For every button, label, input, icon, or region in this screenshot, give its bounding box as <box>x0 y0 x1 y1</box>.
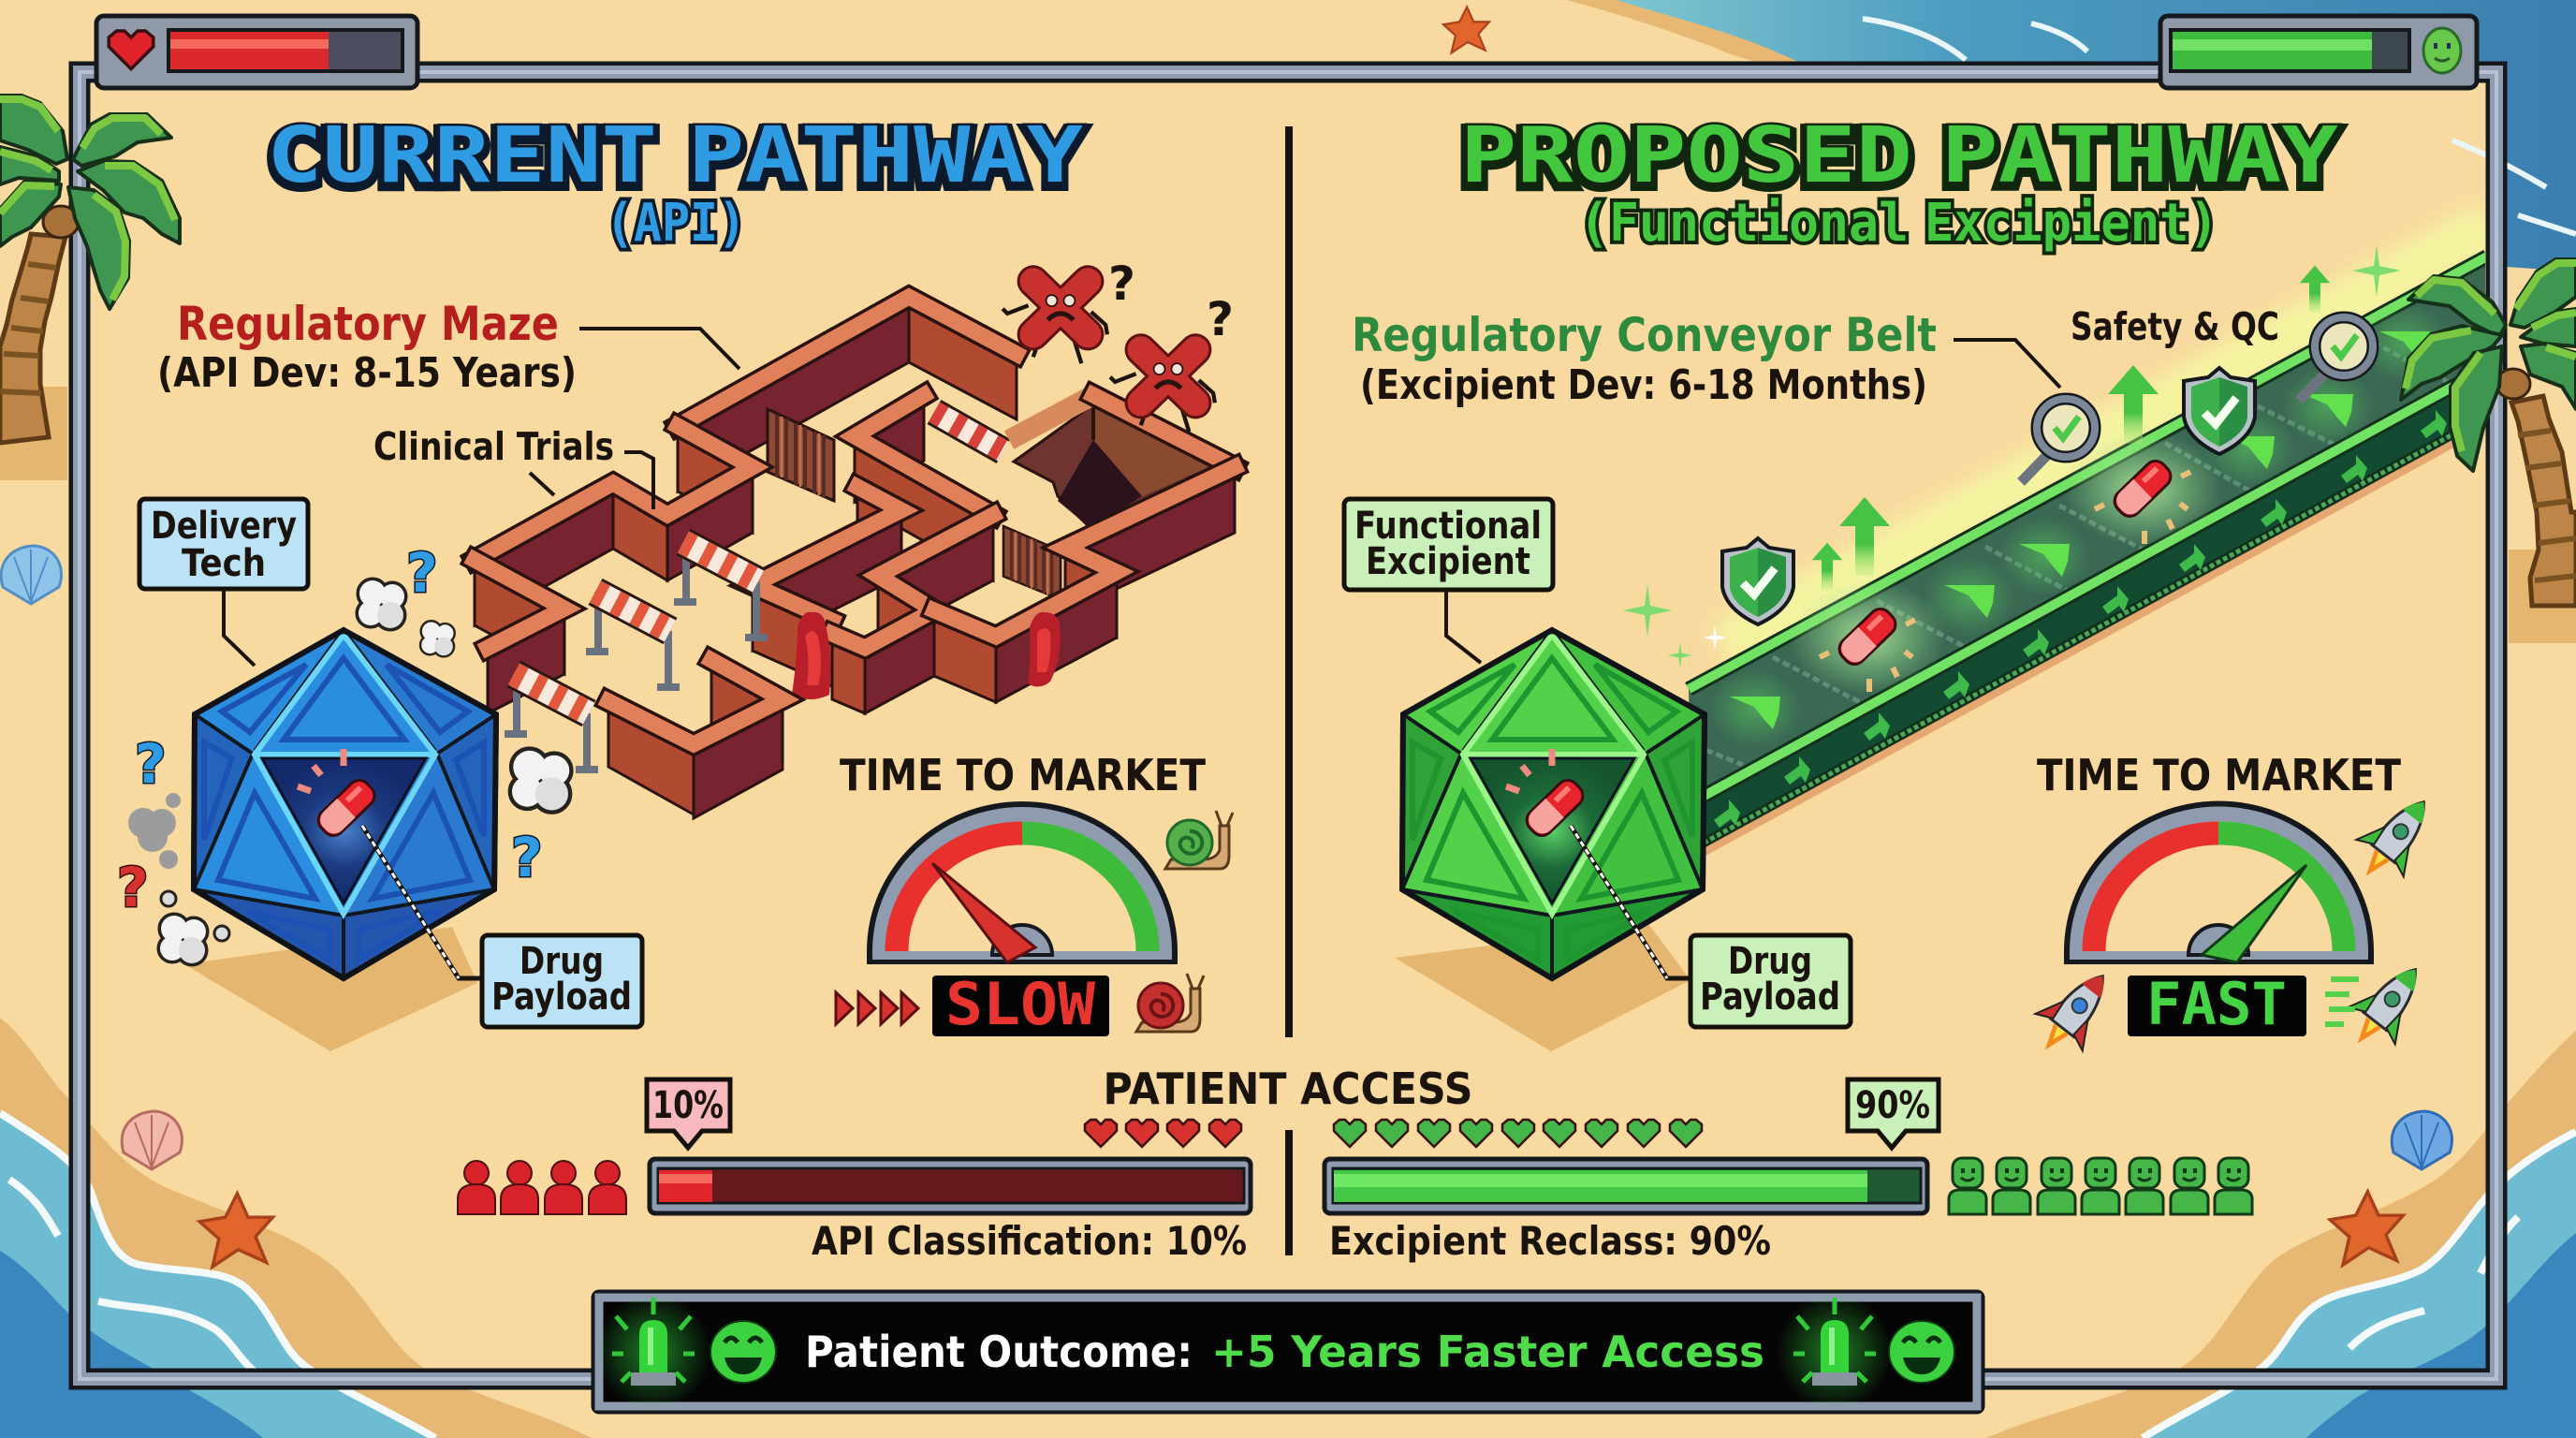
people: green <box>1949 1158 2252 1214</box>
shallow water: bottom right <box>2143 1132 2576 1438</box>
label: regulatory conveyor belt <box>1352 308 1937 409</box>
palm tree: right <box>2401 259 2576 643</box>
back wall <box>678 297 1017 492</box>
fronds <box>2401 259 2576 471</box>
heading: proposed pathway: PATHWAY <box>1941 115 2339 204</box>
sea decoration: blue shell right <box>2392 1111 2452 1169</box>
deep water: bottom right <box>2306 1233 2576 1438</box>
arrow up <box>2108 365 2159 444</box>
label: functional excipient: Excipient <box>1366 540 1530 583</box>
label: drug payload green: Drug <box>1728 940 1812 983</box>
gauge green arc <box>1022 833 1148 951</box>
d20 shadow: green <box>1395 925 1690 1051</box>
bar fill <box>2173 32 2372 69</box>
question mark blue: ? <box>511 826 543 889</box>
inner wall <box>855 395 993 580</box>
gauge frame <box>2064 801 2374 964</box>
belt side <box>1705 397 2450 837</box>
icon: red snail <box>1136 974 1204 1032</box>
shield <box>2184 368 2255 454</box>
gauge hub <box>992 925 1052 955</box>
gate <box>768 409 834 501</box>
icon: siren right <box>1777 1294 1893 1410</box>
question mark red: ? <box>117 856 149 919</box>
lower divider <box>1285 1130 1293 1255</box>
center divider <box>1285 126 1293 1037</box>
leader: conveyor belt <box>1954 340 2060 388</box>
gauge red arc <box>2094 833 2218 951</box>
slime drips <box>792 612 1061 699</box>
sea decoration: starfish bottom right <box>2330 1192 2403 1265</box>
barrier <box>505 674 598 770</box>
smoke <box>359 580 404 628</box>
bubble: 10 percent: 10% <box>652 1084 724 1127</box>
hearts: green <box>1334 1120 1702 1147</box>
belt top edge <box>1689 257 2487 689</box>
gauge frame <box>867 801 1178 964</box>
gate <box>1003 526 1061 599</box>
wave foam: top right <box>1863 19 2576 234</box>
leader: delivery tech <box>224 590 255 666</box>
palm tree: left <box>0 95 180 480</box>
coconut <box>2496 369 2530 399</box>
magnifier <box>2021 399 2095 482</box>
label: safety and qc: Safety & QC <box>2071 304 2279 349</box>
belt side arrows <box>1714 410 2447 828</box>
sparkle <box>1668 642 1692 668</box>
label: excipient reclass: Excipient Reclass: 90% <box>1329 1218 1771 1264</box>
smoke <box>421 622 453 655</box>
label: regulatory conveyor belt: Regulatory Conveyor Belt <box>1352 308 1937 362</box>
heading: proposed pathway: PROPOSED <box>1460 111 1912 200</box>
leader: drug payload green <box>1571 826 1690 978</box>
readout: fast: FAST <box>2146 970 2287 1038</box>
label: regulatory maze: (API Dev: 8-15 Years) <box>157 349 577 397</box>
leader: functional excipient <box>1446 591 1481 663</box>
barrier <box>934 412 1003 451</box>
label: drug payload green: Payload <box>1700 976 1840 1019</box>
arrow up <box>1839 497 1890 576</box>
question mark blue: ? <box>406 541 438 605</box>
icon: smiley left <box>710 1321 776 1383</box>
question mark: ? <box>1108 257 1135 311</box>
lower left wall <box>475 560 564 713</box>
conveyor belt <box>1689 225 2490 858</box>
leader: drug payload blue <box>362 826 482 978</box>
lower block <box>608 660 783 818</box>
pill on belt <box>1820 605 1915 692</box>
heading: proposed pathway: PATHWAY <box>1941 111 2339 200</box>
pill on belt <box>2095 457 2190 544</box>
fronds <box>0 95 180 309</box>
bar fill <box>170 32 329 69</box>
arrow up small <box>1812 543 1842 590</box>
label: delivery tech <box>139 499 308 589</box>
label: regulatory maze: Regulatory Maze <box>177 297 559 351</box>
leader: regulatory maze <box>579 329 739 369</box>
label: drug payload blue <box>482 935 642 1027</box>
deep water: bottom left <box>0 1251 263 1438</box>
sand mound <box>2509 550 2576 643</box>
sparkle white <box>1703 624 1727 651</box>
subheading: API: (API) <box>606 193 746 254</box>
icon: rocket right <box>2334 951 2439 1062</box>
belt bottom edge <box>1705 431 2452 847</box>
trunk <box>2511 396 2576 606</box>
label: drug payload blue: Drug <box>520 940 604 983</box>
smoke <box>512 751 569 811</box>
leader: clinical trials <box>530 452 653 509</box>
d20 shadow: blue <box>184 927 477 1051</box>
bar track <box>2171 30 2409 71</box>
belt glow <box>1722 225 2490 646</box>
sparkle <box>1623 584 1672 637</box>
upper left wall <box>475 426 753 625</box>
arrows: slow <box>836 992 918 1024</box>
question mark blue: ? <box>135 732 167 796</box>
heading: current pathway: PATHWAY <box>688 115 1084 204</box>
outcome text: Patient Outcome: <box>805 1327 1193 1377</box>
gauge needle <box>932 863 1035 962</box>
label: api classification: API Classification: 10% <box>812 1218 1247 1264</box>
bubble: 90 percent <box>1848 1079 1939 1148</box>
belt panel lines <box>1705 337 2448 765</box>
belt middle edge <box>1690 368 2487 803</box>
pit front wall <box>934 467 1235 702</box>
d20: functional excipient <box>1402 630 1705 978</box>
icon: pill in blue d20 <box>298 749 379 840</box>
icon: smiley right <box>1889 1321 1954 1383</box>
d20: delivery tech <box>194 630 496 978</box>
coconut <box>43 206 79 238</box>
label: functional excipient: Functional <box>1354 505 1542 548</box>
label: drug payload blue: Payload <box>491 976 632 1019</box>
pit <box>1009 395 1235 529</box>
shield <box>1722 538 1793 624</box>
label: drug payload green <box>1690 935 1851 1027</box>
banner: patient outcome <box>593 1292 1983 1412</box>
sparkle <box>2352 244 2401 297</box>
question mark: ? <box>1207 292 1234 346</box>
magnifier <box>2299 317 2373 401</box>
outcome value: +5 Years Faster Access <box>1211 1327 1764 1377</box>
health bar: right <box>2160 16 2477 88</box>
label: delivery tech: Delivery <box>151 505 297 548</box>
icon: siren left <box>595 1294 711 1410</box>
sea decoration: starfish top <box>1443 7 1489 52</box>
label: functional excipient <box>1344 499 1553 590</box>
gauge hub <box>2188 925 2248 955</box>
belt chevrons <box>1708 304 2452 748</box>
heading: current pathway <box>267 111 1084 254</box>
smoke <box>160 891 229 963</box>
label: delivery tech: Tech <box>182 542 266 585</box>
heading: current pathway: PATHWAY <box>688 111 1084 200</box>
progress bar: api <box>650 1159 1251 1213</box>
smoke and questions <box>117 541 569 963</box>
middle wall one <box>753 487 901 686</box>
gauge: fast <box>2064 801 2374 964</box>
barrier <box>586 592 680 687</box>
sea decoration: starfish bottom left <box>199 1194 272 1267</box>
middle wall two <box>832 515 993 713</box>
icon: rocket top <box>2343 784 2448 894</box>
bar fill <box>659 1170 712 1202</box>
foam: bottom right <box>2143 1132 2576 1438</box>
label: clinical trials: Clinical Trials <box>373 424 614 469</box>
hearts: red <box>1085 1120 1241 1147</box>
belt top surface <box>1689 257 2487 803</box>
heading: proposed pathway <box>1460 111 2339 254</box>
label: regulatory maze <box>157 297 577 397</box>
bubble: 10 percent <box>647 1079 730 1148</box>
progress bar: excipient <box>1325 1159 1927 1213</box>
icon: pill in green d20 <box>1506 749 1588 840</box>
ocean: top right <box>1617 0 2576 271</box>
bar fill <box>1334 1170 1867 1202</box>
sea decoration: pink shell <box>122 1111 182 1169</box>
subheading: functional excipient: (Functional <box>1579 193 1909 254</box>
label: time to market right: TIME TO MARKET <box>2037 750 2402 800</box>
health bar: left <box>96 16 417 88</box>
sea decoration: blue shell left <box>1 546 61 604</box>
wet sand: bottom right <box>1986 1031 2576 1438</box>
readout: slow: SLOW <box>945 970 1096 1038</box>
heading: proposed pathway: PROPOSED <box>1460 115 1912 204</box>
sand mound <box>0 387 67 480</box>
gauge needle <box>2202 865 2306 962</box>
barrier <box>674 542 768 638</box>
heading: patient access: PATIENT ACCESS <box>1103 1064 1473 1114</box>
speed lines <box>2325 979 2359 1024</box>
subheading: functional excipient: Excipient) <box>1925 193 2218 254</box>
smoke grey <box>128 793 181 869</box>
x monster one <box>1003 281 1107 363</box>
belt glow spots <box>1788 431 2222 695</box>
bubble: 90 percent: 90% <box>1855 1084 1930 1127</box>
label: regulatory conveyor belt: (Excipient Dev: 6-18 Months) <box>1360 361 1927 409</box>
gauge red arc <box>897 833 1022 951</box>
gauge green arc <box>2218 833 2344 951</box>
belt ground shadow <box>1690 423 2487 858</box>
icon: green snail <box>1165 811 1233 869</box>
x monster two <box>1110 349 1215 432</box>
icon: smiley <box>2423 28 2461 73</box>
maze <box>475 297 1235 818</box>
foam: bottom left <box>0 1113 435 1438</box>
subheading: functional excipient <box>1579 193 2218 254</box>
icon: heart <box>109 31 154 69</box>
bar track <box>168 30 402 71</box>
arrow up small <box>2300 266 2330 313</box>
shallow water: bottom left <box>0 1113 435 1438</box>
wet sand: top right <box>1567 0 2576 66</box>
icon: rocket left <box>2022 958 2127 1068</box>
trunk <box>0 234 66 443</box>
label: time to market left: TIME TO MARKET <box>840 750 1207 800</box>
heading: current pathway: CURRENT <box>267 111 657 200</box>
people: red <box>458 1161 626 1214</box>
gauge: slow <box>867 801 1178 964</box>
heading: current pathway: CURRENT <box>267 115 657 204</box>
wet sand: bottom left <box>0 1018 592 1438</box>
